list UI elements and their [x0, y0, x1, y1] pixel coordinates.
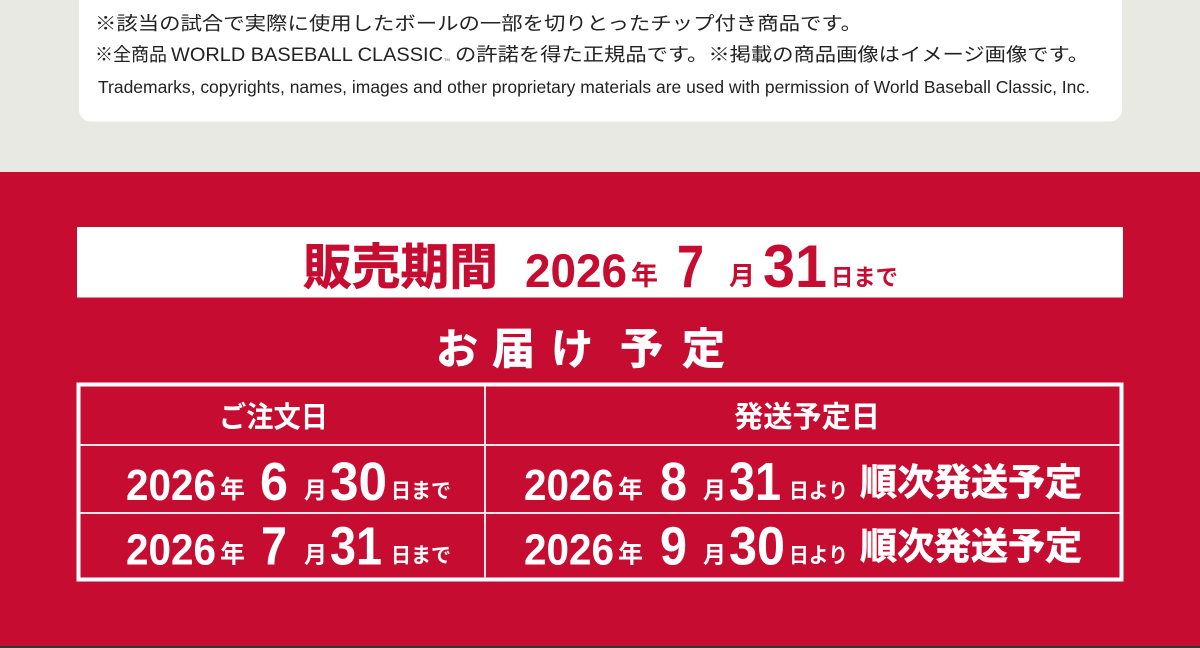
row 1 ship date: 順次発送予定: [860, 462, 1082, 503]
row 2 order date: 2026: [126, 526, 216, 574]
row 1 order date: 年: [220, 476, 245, 504]
row 1 order date: 日まで: [391, 480, 451, 503]
note line 2: WORLD BASEBALL CLASSIC: [171, 44, 443, 66]
sales period date: 31: [763, 233, 827, 300]
row 1 order date: 30: [330, 452, 387, 512]
row 2 ship date: 2026: [524, 526, 614, 574]
row 1 ship date: 年: [618, 476, 643, 504]
sales period date: 2026: [525, 244, 627, 297]
heading: delivery schedule: お: [436, 326, 478, 373]
row 2 order date: 7: [261, 516, 287, 576]
panel: sales period banner: [77, 227, 1123, 300]
row 2 ship date: [524, 516, 1082, 576]
heading: delivery schedule: け: [551, 326, 593, 373]
row 1 ship date: 2026: [524, 461, 614, 510]
heading: delivery schedule: 定: [682, 326, 725, 374]
sales period date: [525, 233, 898, 300]
sales period date: 7: [677, 233, 704, 300]
row 1 order date: 2026: [126, 461, 216, 510]
panel: red sales section: [0, 172, 1200, 648]
row 2 ship date: 9: [660, 516, 687, 576]
delivery table: [78, 384, 1122, 580]
heading: delivery schedule: 予: [620, 326, 663, 374]
row 1 order date: 月: [304, 477, 327, 503]
panel: notes card: [79, 0, 1122, 122]
row 2 order date: 月: [304, 542, 327, 568]
row 2 order date: 年: [220, 540, 245, 568]
note line 2: の許諾を得た正規品です。※掲載の商品画像はイメージ画像です。: [455, 44, 1089, 65]
row 2 order date: 31: [330, 516, 382, 576]
row 1 order date: 6: [260, 452, 288, 512]
row 1 ship date: 8: [660, 452, 687, 512]
trademark line: Trademarks, copyrights, names, images and other proprietary materials are used with permission of World Baseball Classic, Inc.: [98, 77, 1090, 97]
note line 2: [95, 44, 1089, 66]
note line 1: ※該当の試合で実際に使用したボールの一部を切りとったチップ付き商品です。: [95, 13, 862, 34]
row 1 ship date: 31: [729, 452, 781, 512]
row 2 ship date: 順次発送予定: [860, 526, 1082, 567]
note line 2: ※全商品: [95, 44, 167, 65]
heading: delivery schedule: 届: [492, 326, 535, 374]
sales period label: 販売期間: [303, 241, 498, 295]
sales period date: 月: [729, 261, 755, 291]
row 2 ship date: 年: [618, 540, 643, 568]
row 2 order date: 日まで: [391, 544, 451, 568]
row 2 ship date: 日より: [789, 544, 848, 568]
row 2 order date: [126, 516, 451, 576]
sales period date: 年: [631, 261, 658, 291]
row 1 ship date: 日より: [789, 480, 848, 503]
row 2 ship date: 30: [729, 516, 785, 576]
row 1 order date: [126, 452, 451, 512]
note line 2: TM: [444, 57, 450, 62]
row 1 ship date: [524, 452, 1082, 512]
heading: delivery schedule: [436, 326, 725, 374]
row 2 ship date: 月: [703, 542, 726, 568]
sales period date: 日まで: [831, 264, 898, 290]
column header: ship date: 発送予定日: [734, 401, 880, 434]
column header: order date: ご注文日: [219, 400, 328, 434]
row 1 ship date: 月: [703, 477, 726, 503]
